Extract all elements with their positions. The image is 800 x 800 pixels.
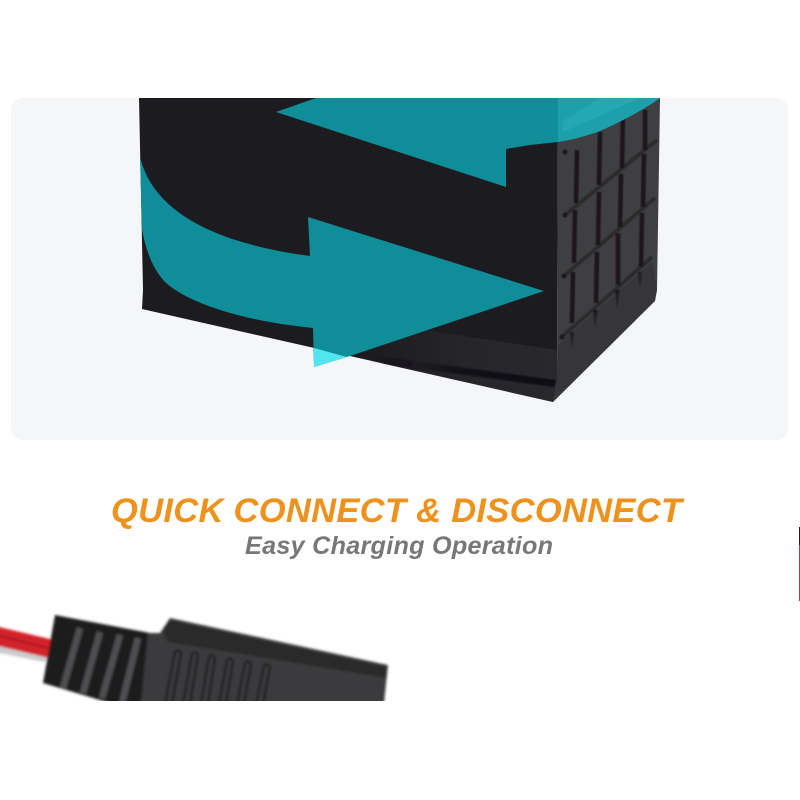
arrow: lower teal arrow: [140, 157, 544, 367]
strain relief grip: [43, 615, 150, 712]
title: QUICK CONNECT & DISCONNECT: [111, 492, 685, 530]
battery base step: [370, 322, 557, 402]
battery side face: [553, 98, 660, 402]
subtitle: Easy Charging Operation: [245, 532, 553, 560]
base groove: [370, 355, 556, 387]
arrow: top teal arrow: [276, 98, 558, 187]
battery front face: [139, 98, 558, 402]
side base shading: [553, 262, 657, 402]
edge sliver: next product: [799, 527, 800, 601]
arrow highlight: [563, 98, 640, 132]
red wire: [0, 626, 54, 662]
connector body: [140, 618, 388, 712]
battery illustration: [139, 98, 660, 402]
side grid ridges and slots: [560, 110, 657, 349]
arrow tip outside battery: [314, 348, 347, 367]
arrow: top arrow overlay on side: [558, 98, 660, 142]
infographic canvas: [0, 98, 800, 701]
connector illustration: [0, 615, 388, 712]
panel: product background: [11, 98, 788, 440]
